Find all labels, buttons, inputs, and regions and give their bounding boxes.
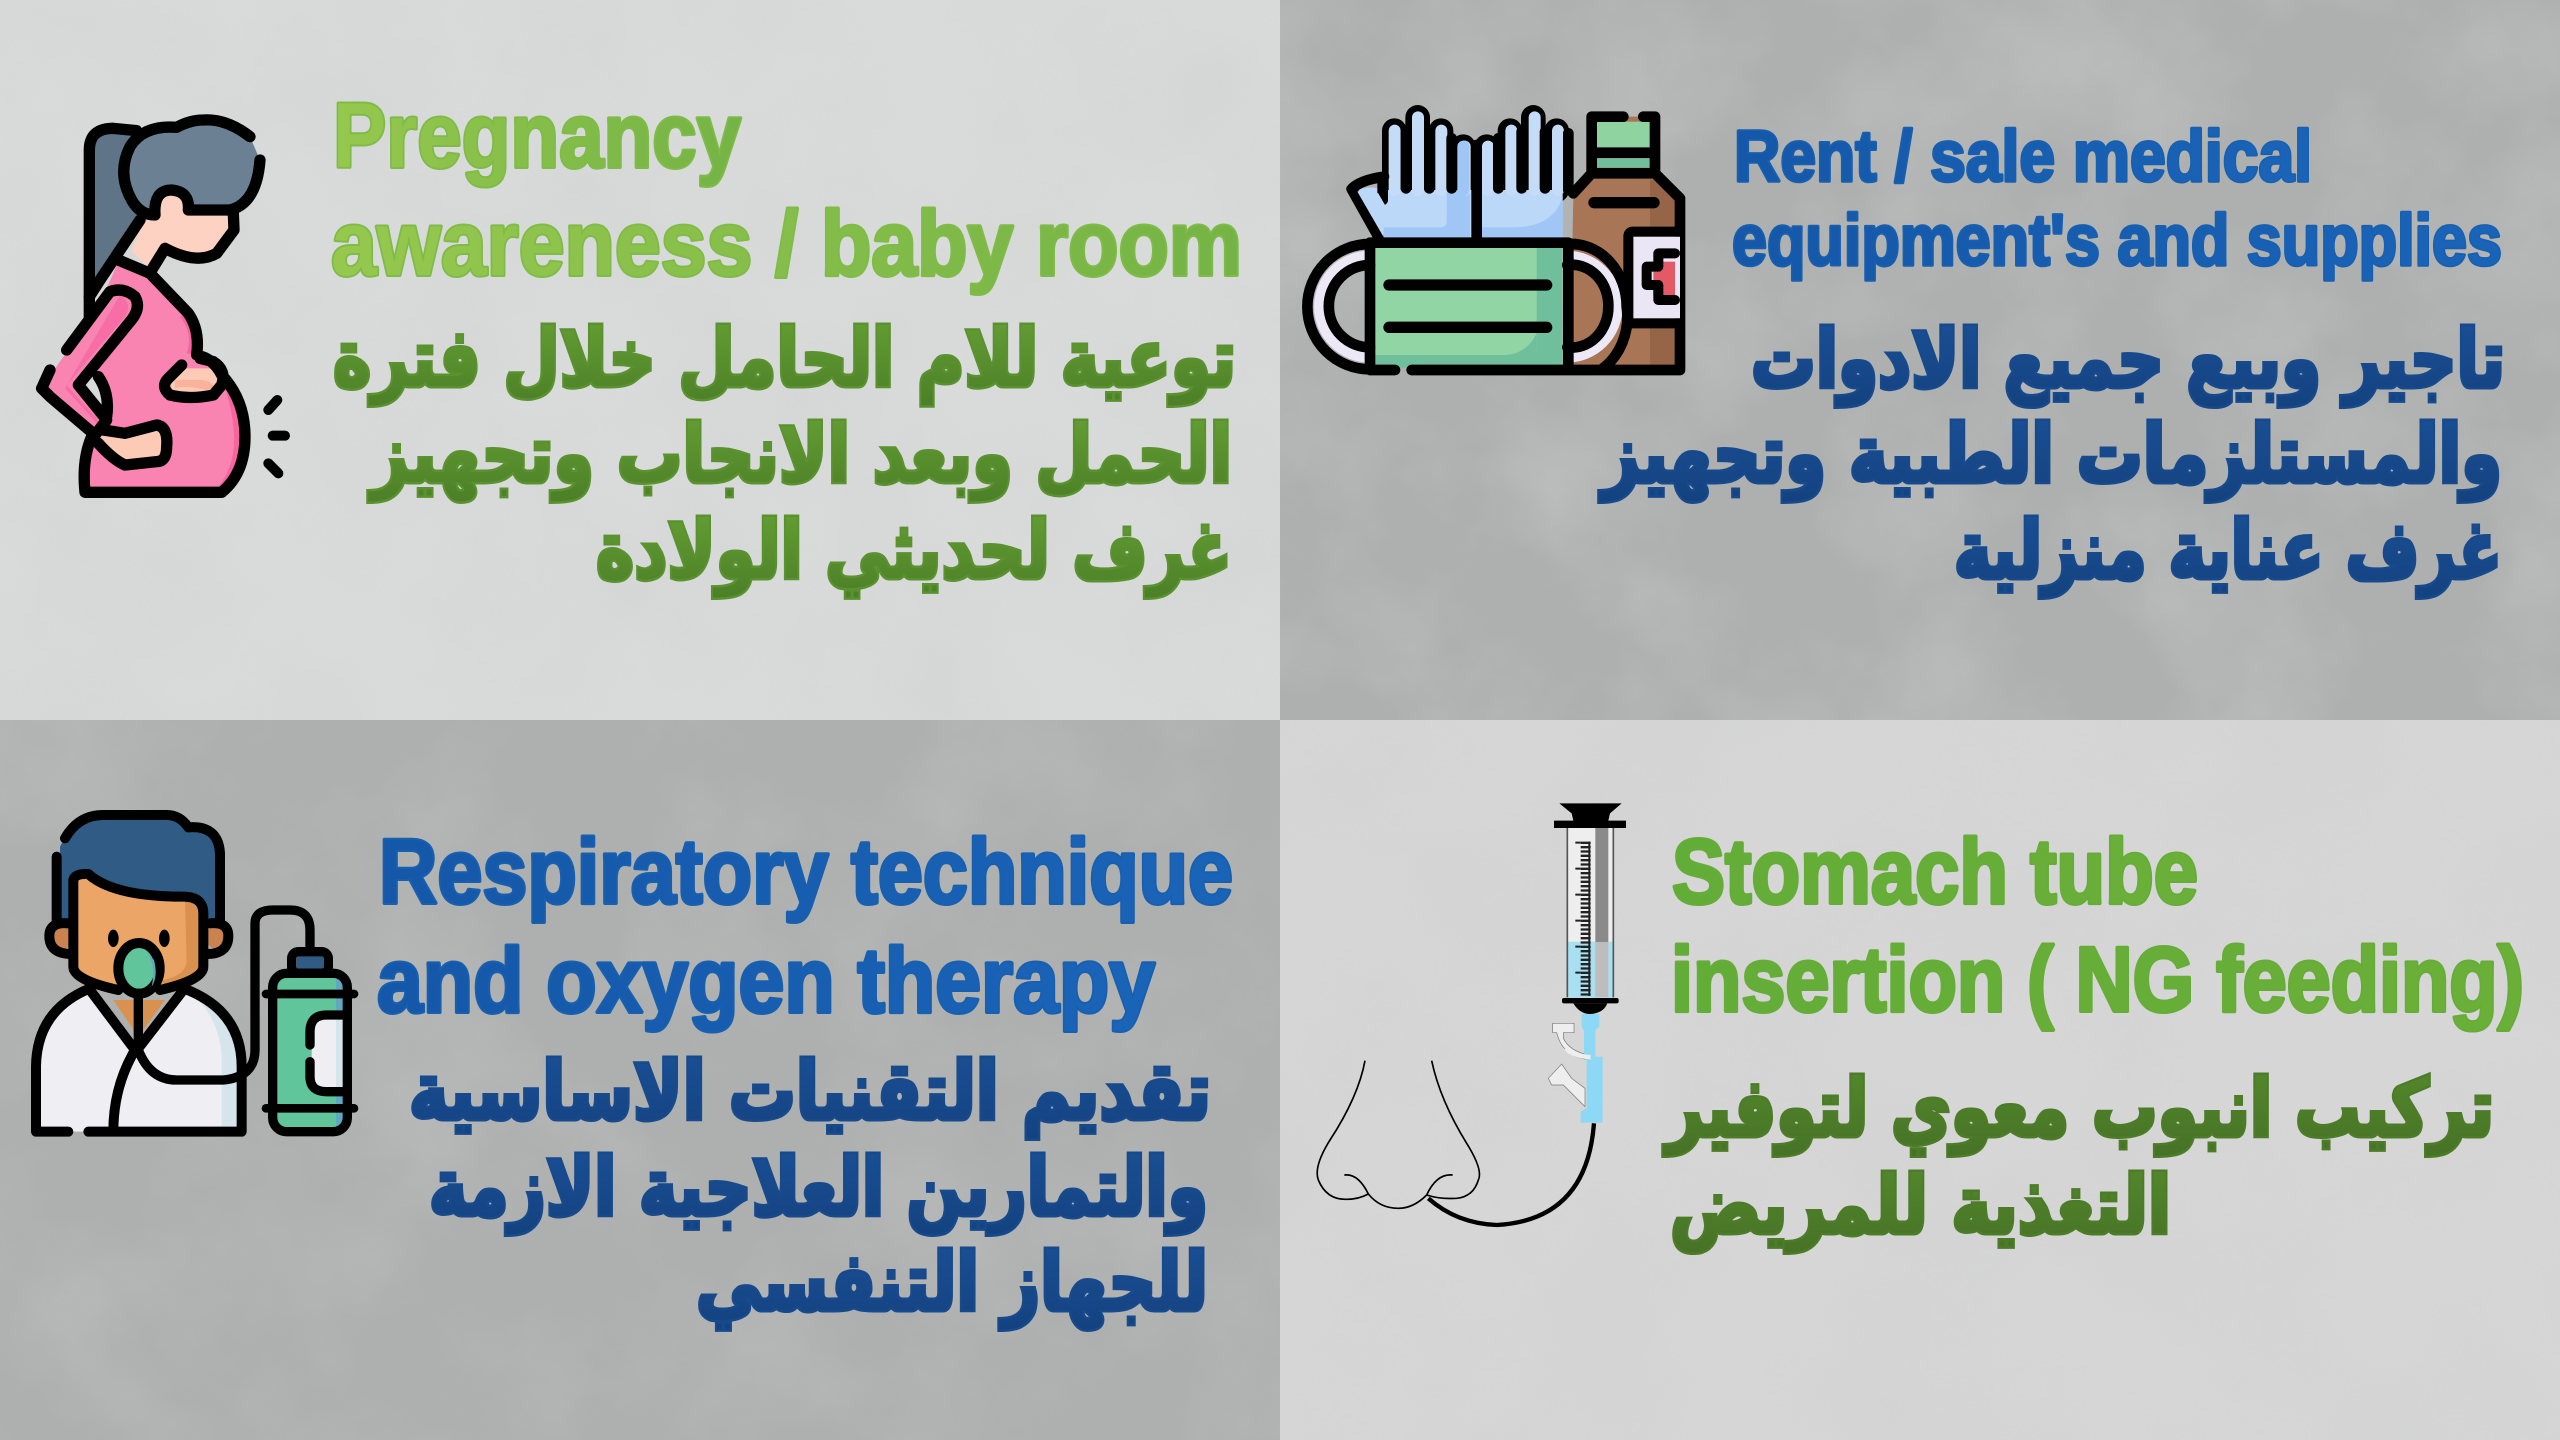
text block: Arabic pregnancy description: الحمل وبعد الانجاب وتجهيز [368,408,1232,502]
text block: Arabic respiratory description: والتمارين العلاجية الازمة [429,1141,1208,1235]
heading: rent / sale medical equipment [1732,117,2502,281]
text block: Arabic respiratory description: للجهاز التنفسي [696,1236,1208,1330]
text block: Arabic pregnancy description: غرف لحديثي الولادة [596,504,1232,598]
panel: respiratory technique [0,720,1280,1440]
heading: pregnancy awareness / baby room: awareness / baby room [331,193,1242,295]
heading: stomach tube insertion: Stomach tube [1672,821,2198,923]
text block: Arabic respiratory description: تقديم التقنيات الاساسية [409,1045,1211,1139]
text block: Arabic pregnancy description [333,312,1236,598]
icon: patient with oxygen cylinder [36,815,354,1132]
text block: Arabic equipment description [1599,313,2505,598]
heading: pregnancy awareness / baby room [331,85,1242,295]
icon: gloves, mask and bottle [1307,117,1682,370]
text block: Arabic respiratory description [409,1045,1211,1330]
heading: rent / sale medical equipment: Rent / sale medical [1734,117,2312,197]
heading: pregnancy awareness / baby room: Pregnancy [333,85,741,187]
text block: Arabic stomach tube description [1663,1062,2494,1253]
heading: respiratory technique and oxygen therapy: Respiratory technique [379,821,1233,923]
text block: Arabic stomach tube description: التغذية للمريض [1670,1159,2171,1253]
panel: pregnancy awareness [0,0,1280,720]
heading: respiratory technique and oxygen therapy [377,821,1233,1032]
text block: Arabic pregnancy description: توعية للام الحامل خلال فترة [333,312,1236,406]
panel: stomach tube insertion [1280,720,2560,1440]
heading: respiratory technique and oxygen therapy: and oxygen therapy [377,930,1155,1032]
icon: syringe, feeding tube and nose [1317,803,1626,1225]
heading: stomach tube insertion [1671,821,2524,1031]
panel: medical equipment [1280,0,2560,720]
icon: pregnant woman [42,120,285,492]
